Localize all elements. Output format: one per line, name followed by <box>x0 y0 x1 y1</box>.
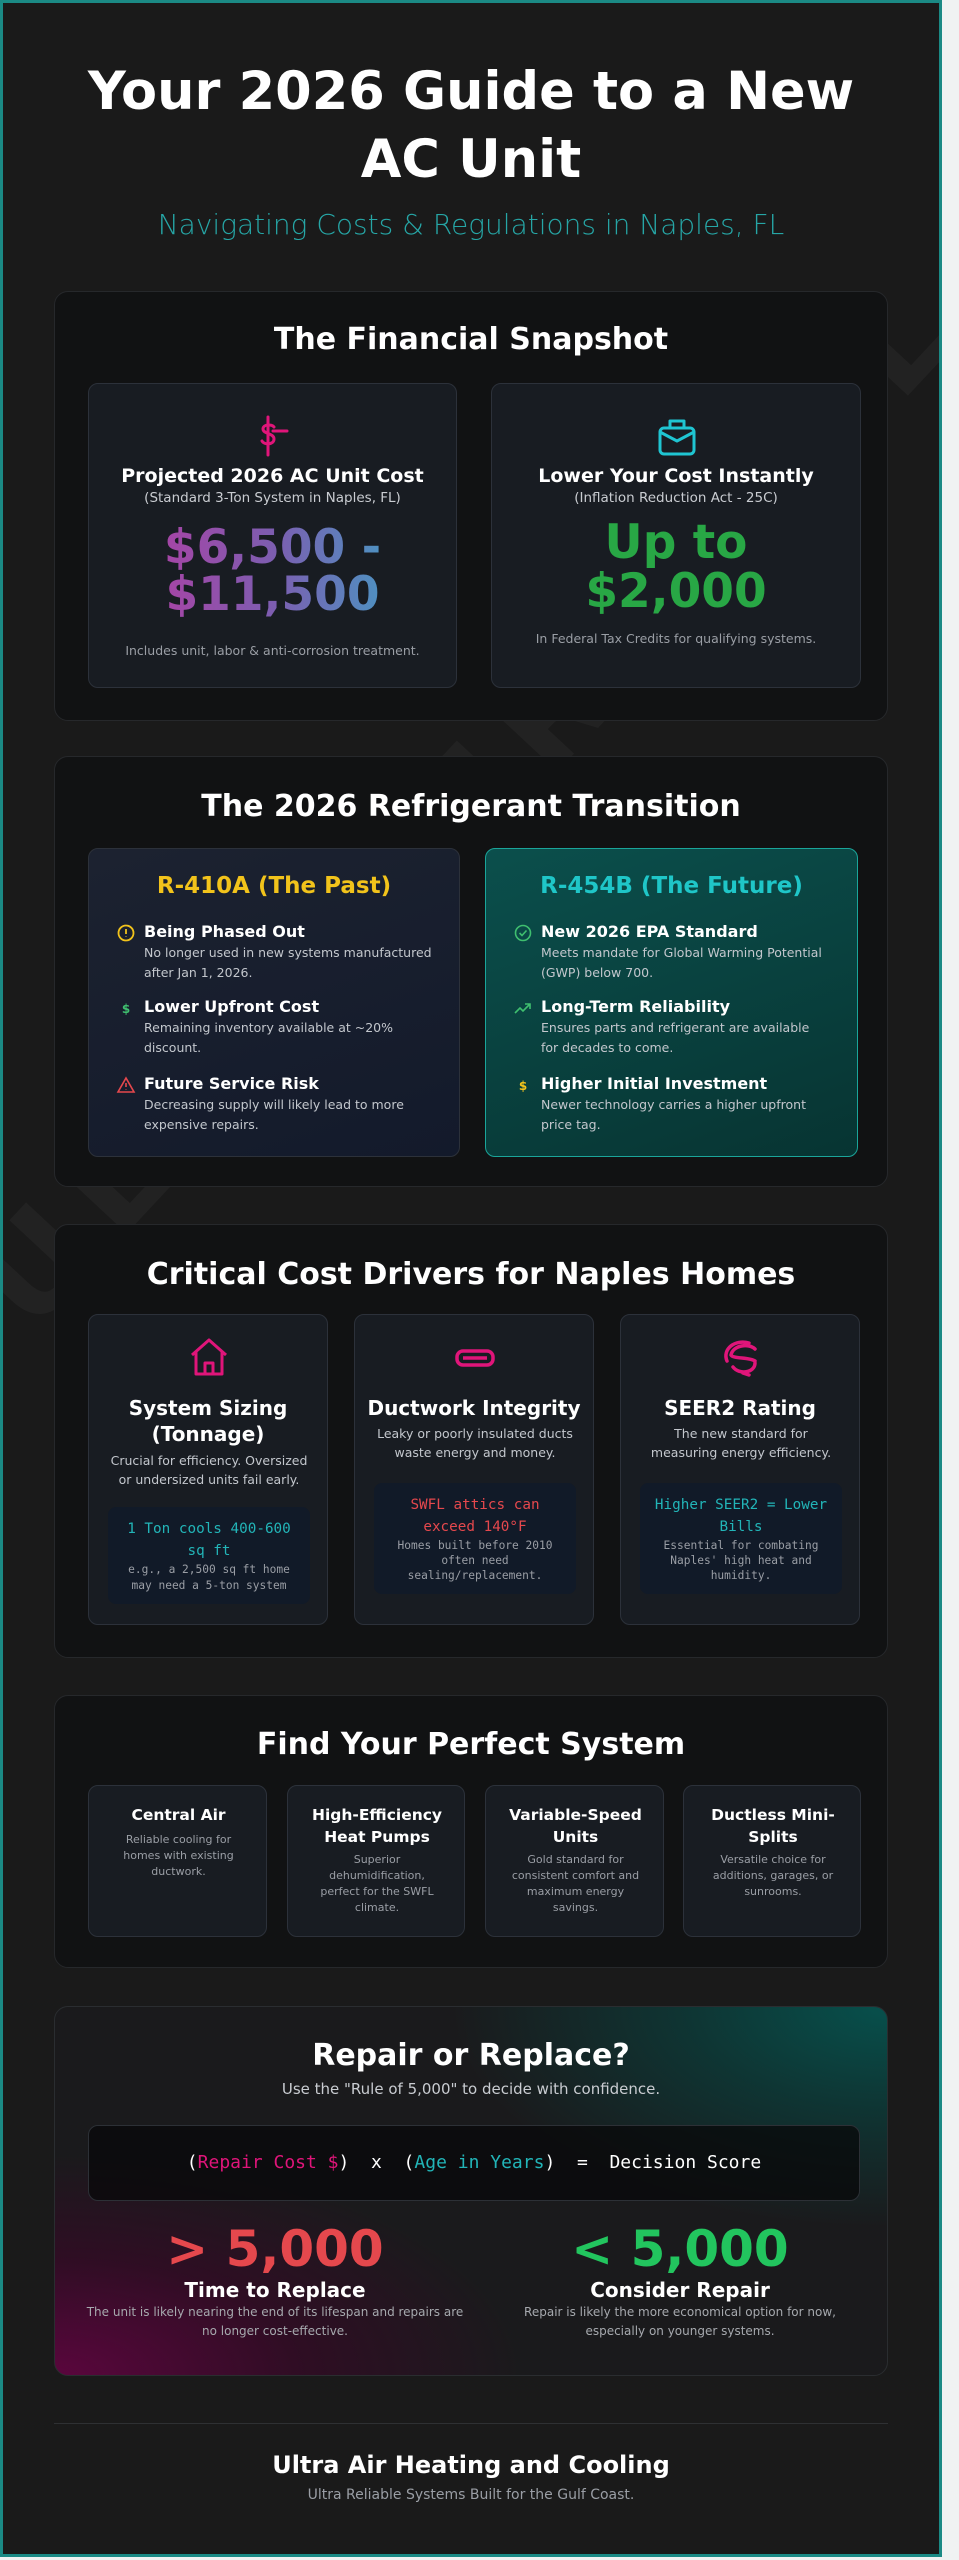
card: heat pumps <box>287 1785 465 1937</box>
title: AC Unit <box>361 129 581 190</box>
result: replace: > 5,000 <box>166 2220 384 2278</box>
footer <box>272 2451 670 2503</box>
title: Your 2026 Guide to a New <box>88 61 854 122</box>
icon: duct <box>455 1349 495 1367</box>
result: repair <box>524 2220 836 2338</box>
result: repair: Consider Repair <box>590 2278 770 2302</box>
title <box>87 61 854 190</box>
card: R-454B: $ <box>519 1079 527 1093</box>
card: SEER2 <box>620 1314 860 1625</box>
card: system sizing: Crucial for efficiency. Oversized or undersized units fail early. <box>111 1453 307 1487</box>
subtitle: Navigating Costs & Regulations in Naples, FL <box>158 208 784 241</box>
card: SEER2: The new standard for <box>674 1426 808 1441</box>
card: heat pumps: Superior dehumidification, perfect for the SWFL climate. <box>320 1853 434 1914</box>
text: credit amount: $2,000 <box>585 564 767 619</box>
item: reliability: Long-Term Reliability <box>541 997 730 1016</box>
item: lower cost <box>122 997 393 1055</box>
item: service risk: Future Service Risk <box>144 1074 319 1093</box>
item: EPA standard <box>514 922 822 980</box>
card: R-410A: $ <box>122 1002 130 1016</box>
item: phased out: Being Phased Out <box>144 922 305 941</box>
heading: cost drivers: Critical Cost Drivers for Naples Homes <box>147 1257 795 1292</box>
heading: financial snapshot: The Financial Snapshot <box>274 322 668 357</box>
panel: financial snapshot <box>54 291 888 721</box>
item: EPA standard: New 2026 EPA Standard <box>541 922 758 941</box>
item: phased out <box>118 922 432 980</box>
item: higher investment <box>519 1074 806 1132</box>
card: mini-splits: Versatile choice for additions, garages, or sunrooms. <box>713 1853 833 1898</box>
card: ductwork <box>354 1314 594 1625</box>
item: service risk: Decreasing supply will likely lead to more expensive repairs. <box>144 1097 404 1132</box>
text: price range <box>89 524 456 618</box>
item: reliability: for decades to come. <box>541 1040 673 1055</box>
card: tax credits: In Federal Tax Credits for qualifying systems. <box>536 631 816 646</box>
panel: find your system <box>54 1695 888 1968</box>
card: SEER2: SEER2 Rating <box>664 1396 816 1420</box>
card: ductwork: Leaky or poorly insulated ducts waste energy and money. <box>377 1426 573 1460</box>
text: credit amount <box>585 515 767 619</box>
card: tax credits <box>491 383 861 688</box>
panel: refrigerant transition <box>54 756 888 1187</box>
callout: tonnage <box>108 1507 310 1604</box>
card: variable-speed <box>485 1785 664 1937</box>
card: central air: Reliable cooling for homes with existing ductwork. <box>123 1833 234 1878</box>
footer: Ultra Air Heating and Cooling <box>272 2451 670 2479</box>
callout: tonnage: 1 Ton cools 400-600 sq ft <box>127 1521 291 1559</box>
text: price range: $6,500 - <box>164 520 381 575</box>
item: phased out: No longer used in new systems manufactured after Jan 1, 2026. <box>144 945 432 980</box>
panel: repair or replace <box>54 2006 888 2376</box>
panel: repair or replace: Use the "Rule of 5,000" to decide with confidence. <box>282 2080 660 2098</box>
result: replace <box>86 2220 463 2338</box>
callout: attics <box>374 1483 576 1594</box>
result: repair: < 5,000 <box>571 2220 789 2278</box>
heading: repair or replace: Repair or Replace? <box>312 2038 630 2073</box>
icon: gauge <box>724 1340 757 1377</box>
icon: briefcase <box>658 420 696 456</box>
item: higher investment: Newer technology carries a higher upfront price tag. <box>541 1097 806 1132</box>
callout: SEER2: Higher SEER2 = Lower Bills <box>655 1497 827 1535</box>
heading: refrigerant: The 2026 Refrigerant Transition <box>201 789 741 824</box>
callout: SEER2 <box>640 1483 842 1594</box>
card: system sizing: System Sizing <box>129 1396 287 1420</box>
callout: SEER2: Essential for combating Naples' high heat and humidity. <box>664 1539 818 1582</box>
card: R-410A: R-410A (The Past) <box>157 873 391 899</box>
card: ductwork: Ductwork Integrity <box>367 1396 581 1420</box>
result: replace: The unit is likely nearing the end of its lifespan and repairs are no longer cost-effective. <box>87 2305 463 2338</box>
card: heat pumps: High-Efficiency Heat Pumps <box>312 1806 442 1846</box>
card: projected cost <box>88 383 457 688</box>
card: mini-splits <box>683 1785 861 1937</box>
item: service risk <box>116 1074 404 1132</box>
card: tax credits: (Inflation Reduction Act - 25C) <box>574 490 778 506</box>
result: repair: Repair is likely the more economical option for now, especially on younger systems. <box>524 2305 836 2338</box>
card: SEER2: measuring energy efficiency. <box>651 1445 831 1460</box>
icon: house <box>191 1338 227 1376</box>
formula box: (Repair Cost $) x (Age in Years) = Decision Score <box>187 2152 761 2173</box>
item: reliability <box>514 997 809 1055</box>
card: R-454B: R-454B (The Future) <box>540 873 803 899</box>
card: projected cost: (Standard 3-Ton System in Naples, FL) <box>144 490 401 506</box>
callout: attics: SWFL attics can exceed 140°F <box>410 1497 540 1535</box>
card: central air: Central Air <box>131 1806 226 1824</box>
text: credit amount: Up to <box>605 515 747 570</box>
callout: attics: Homes built before 2010 often need sealing/replacement. <box>398 1539 552 1582</box>
card: tax credits: Lower Your Cost Instantly <box>538 465 814 487</box>
card: R-454B <box>485 848 858 1157</box>
card: variable-speed: Gold standard for consistent comfort and maximum energy savings. <box>512 1853 639 1914</box>
card: R-410A <box>88 848 460 1157</box>
item: reliability: Ensures parts and refrigerant are available <box>541 1020 809 1035</box>
card: central air <box>88 1785 267 1937</box>
card: system sizing <box>88 1314 328 1625</box>
icon: dollar <box>260 416 288 456</box>
item: lower cost: Lower Upfront Cost <box>144 997 319 1016</box>
callout: tonnage: e.g., a 2,500 sq ft home may need a 5-ton system <box>128 1563 290 1592</box>
footer: Ultra Reliable Systems Built for the Gulf Coast. <box>308 2487 634 2503</box>
heading: find system: Find Your Perfect System <box>257 1727 685 1762</box>
formula box <box>88 2125 860 2201</box>
card: mini-splits: Ductless Mini-Splits <box>711 1806 835 1846</box>
card: variable-speed: Variable-Speed Units <box>509 1806 642 1846</box>
panel: cost drivers <box>54 1224 888 1658</box>
card: projected cost: Includes unit, labor & anti-corrosion treatment. <box>125 643 420 658</box>
text: price range: $11,500 <box>165 567 380 622</box>
item: lower cost: Remaining inventory available at ~20% discount. <box>144 1020 393 1055</box>
result: replace: Time to Replace <box>184 2278 366 2302</box>
item: EPA standard: Meets mandate for Global Warming Potential (GWP) below 700. <box>541 945 822 980</box>
text: card title: Projected 2026 AC Unit Cost <box>121 465 424 487</box>
item: higher investment: Higher Initial Investment <box>541 1074 767 1093</box>
card: system sizing: (Tonnage) <box>152 1422 264 1446</box>
